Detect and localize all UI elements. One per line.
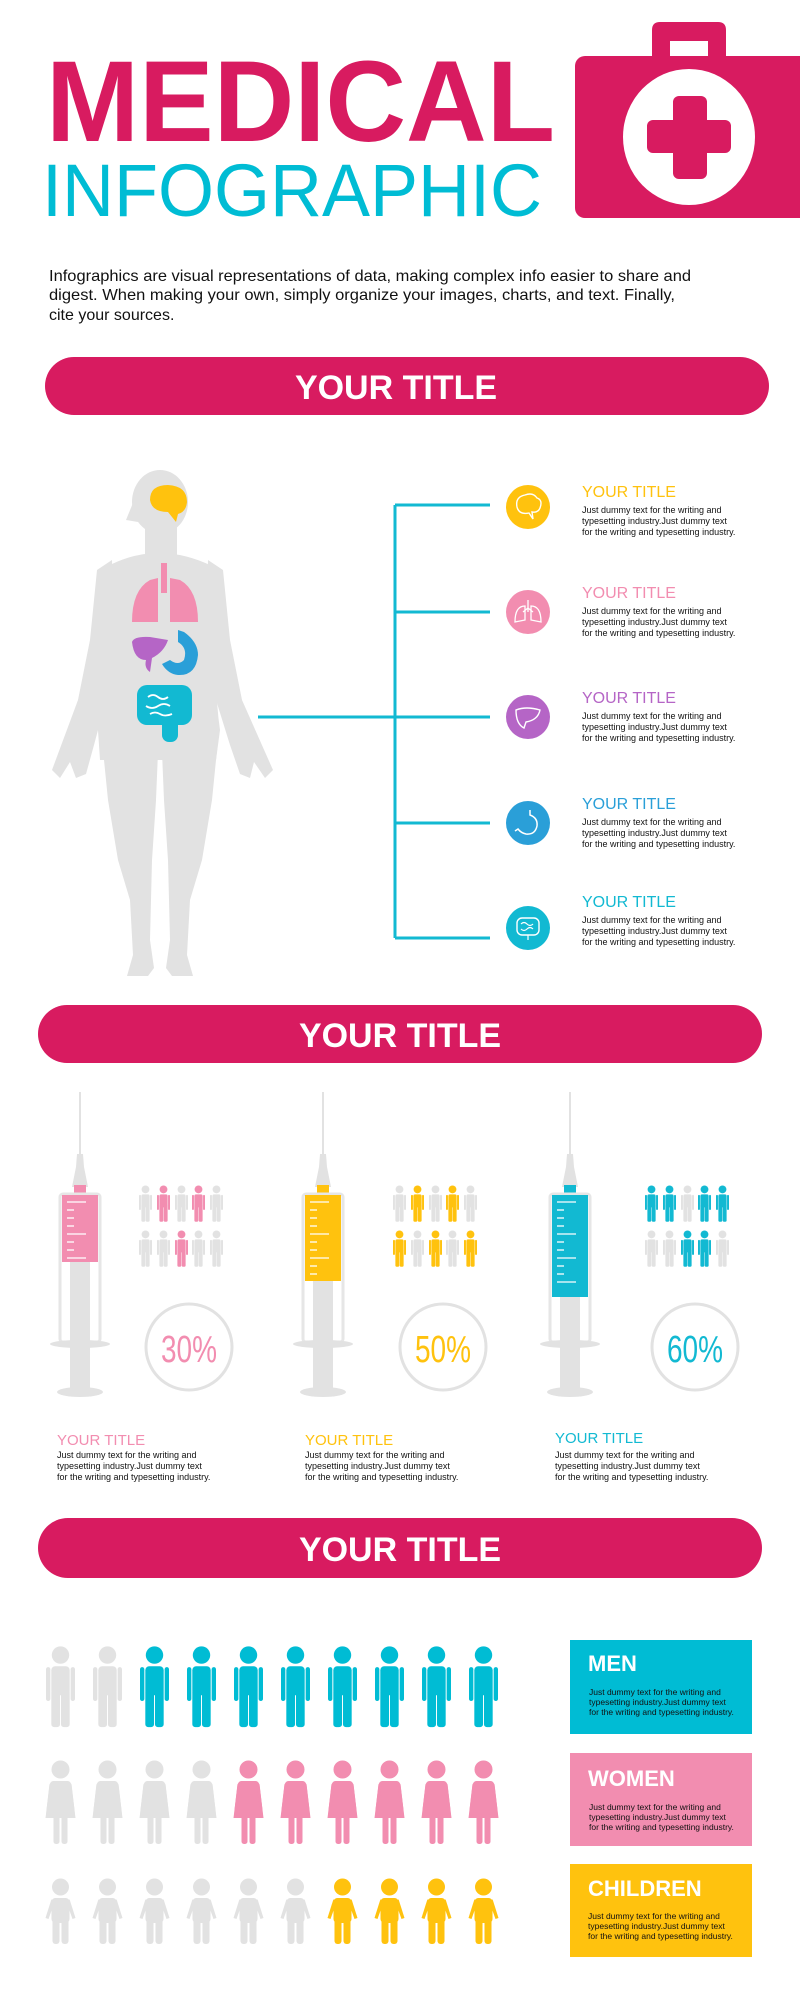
title bar 1: YOUR TITLE xyxy=(295,369,497,407)
icon: brain circle xyxy=(506,485,550,529)
icon: intestines circle xyxy=(506,906,550,950)
syringe panel 1: 30% xyxy=(50,1092,232,1482)
box: MEN xyxy=(570,1640,752,1734)
box: WOMEN: for the writing and typesetting industry. xyxy=(589,1822,734,1832)
women row xyxy=(46,1760,498,1844)
item: liver: for the writing and typesetting industry. xyxy=(582,733,735,743)
title bar 1 xyxy=(45,357,769,415)
box: WOMEN xyxy=(570,1753,752,1846)
syringe pink xyxy=(50,1092,110,1397)
syringe yellow xyxy=(293,1092,353,1397)
icon: medical briefcase xyxy=(575,22,800,218)
caption 1: Just dummy text for the writing and xyxy=(57,1450,197,1460)
item: lungs: YOUR TITLE xyxy=(582,585,676,602)
item: liver: Just dummy text for the writing and xyxy=(582,711,722,721)
subtitle: INFOGRAPHIC: INFOGRAPHIC xyxy=(42,149,542,232)
item: brain: typesetting industry.Just dummy text xyxy=(582,516,727,526)
box: CHILDREN: typesetting industry.Just dummy text xyxy=(588,1921,725,1931)
item: brain xyxy=(506,484,735,537)
item: stomach: Just dummy text for the writing and xyxy=(582,817,722,827)
men row xyxy=(46,1646,498,1727)
percent circle 30% xyxy=(146,1304,232,1390)
title bar 3 xyxy=(38,1518,762,1578)
box: CHILDREN: for the writing and typesetting industry. xyxy=(588,1931,733,1941)
caption 2: for the writing and typesetting industry. xyxy=(305,1472,458,1482)
item: intestines: Just dummy text for the writing and xyxy=(582,915,722,925)
people grid yellow xyxy=(393,1186,477,1267)
item: intestines: typesetting industry.Just dummy text xyxy=(582,926,727,936)
syringe teal xyxy=(540,1092,600,1397)
organ: liver xyxy=(132,637,168,672)
caption 2: typesetting industry.Just dummy text xyxy=(305,1461,450,1471)
caption 3: Just dummy text for the writing and xyxy=(555,1450,695,1460)
item: stomach xyxy=(506,796,735,849)
item: lungs xyxy=(506,585,735,638)
item: lungs: Just dummy text for the writing and xyxy=(582,606,722,616)
caption 2 xyxy=(305,1432,458,1482)
connector lines xyxy=(258,505,490,938)
organ: stomach xyxy=(162,630,198,675)
icon: liver circle xyxy=(506,695,550,739)
item: brain: for the writing and typesetting industry. xyxy=(582,527,735,537)
icon: stomach circle xyxy=(506,801,550,845)
intro paragraph: cite your sources. xyxy=(49,307,174,324)
box: WOMEN: typesetting industry.Just dummy text xyxy=(589,1812,726,1822)
percent circle 30%: 30% xyxy=(161,1329,217,1371)
percent circle 50%: 50% xyxy=(415,1329,471,1371)
children row xyxy=(46,1878,498,1944)
box: WOMEN: Just dummy text for the writing and xyxy=(589,1802,721,1812)
item: liver xyxy=(506,690,735,743)
title: MEDICAL: MEDICAL xyxy=(46,38,555,166)
item: stomach: YOUR TITLE xyxy=(582,796,676,813)
percent circle 50% xyxy=(400,1304,486,1390)
box: MEN: for the writing and typesetting industry. xyxy=(589,1707,734,1717)
caption 3: YOUR TITLE xyxy=(555,1430,643,1447)
item: stomach: for the writing and typesetting industry. xyxy=(582,839,735,849)
intro paragraph xyxy=(49,268,691,324)
caption 1 xyxy=(57,1432,210,1482)
item: liver: typesetting industry.Just dummy text xyxy=(582,722,727,732)
box: CHILDREN: CHILDREN xyxy=(588,1876,702,1901)
people grid teal xyxy=(645,1186,729,1267)
human body figure xyxy=(52,470,273,976)
caption 1: typesetting industry.Just dummy text xyxy=(57,1461,202,1471)
item: intestines: YOUR TITLE xyxy=(582,894,676,911)
title bar 3: YOUR TITLE xyxy=(299,1531,501,1569)
caption 3: typesetting industry.Just dummy text xyxy=(555,1461,700,1471)
item: intestines: for the writing and typesetting industry. xyxy=(582,937,735,947)
box: MEN: Just dummy text for the writing and xyxy=(589,1687,721,1697)
organ: brain xyxy=(150,485,187,522)
item: lungs: for the writing and typesetting industry. xyxy=(582,628,735,638)
caption 3 xyxy=(555,1430,708,1482)
item: lungs: typesetting industry.Just dummy text xyxy=(582,617,727,627)
title bar 2: YOUR TITLE xyxy=(299,1017,501,1055)
caption 2: YOUR TITLE xyxy=(305,1432,393,1449)
title bar 2 xyxy=(38,1005,762,1063)
box: WOMEN: WOMEN xyxy=(588,1766,675,1791)
caption 2: Just dummy text for the writing and xyxy=(305,1450,445,1460)
percent circle 60%: 60% xyxy=(667,1329,723,1371)
syringe panel 2: 50% xyxy=(293,1092,486,1482)
intro paragraph: digest. When making your own, simply organize your images, charts, and text. Finally, xyxy=(49,287,675,304)
syringe panel 3: 60% xyxy=(540,1092,738,1482)
item: stomach: typesetting industry.Just dummy text xyxy=(582,828,727,838)
box: CHILDREN: Just dummy text for the writing and xyxy=(588,1911,720,1921)
caption 3: for the writing and typesetting industry. xyxy=(555,1472,708,1482)
percent circle 60% xyxy=(652,1304,738,1390)
caption 1: for the writing and typesetting industry. xyxy=(57,1472,210,1482)
intro paragraph: Infographics are visual representations of data, making complex info easier to share and xyxy=(49,268,691,285)
organ: intestines xyxy=(137,685,192,742)
box: CHILDREN xyxy=(570,1864,752,1957)
item: liver: YOUR TITLE xyxy=(582,690,676,707)
organ: lungs xyxy=(132,563,198,622)
box: MEN: MEN xyxy=(588,1651,637,1676)
item: brain: Just dummy text for the writing and xyxy=(582,505,722,515)
caption 1: YOUR TITLE xyxy=(57,1432,145,1449)
icon: lungs circle xyxy=(506,590,550,634)
item: intestines xyxy=(506,894,735,950)
item: brain: YOUR TITLE xyxy=(582,484,676,501)
people grid pink xyxy=(139,1186,223,1267)
box: MEN: typesetting industry.Just dummy text xyxy=(589,1697,726,1707)
